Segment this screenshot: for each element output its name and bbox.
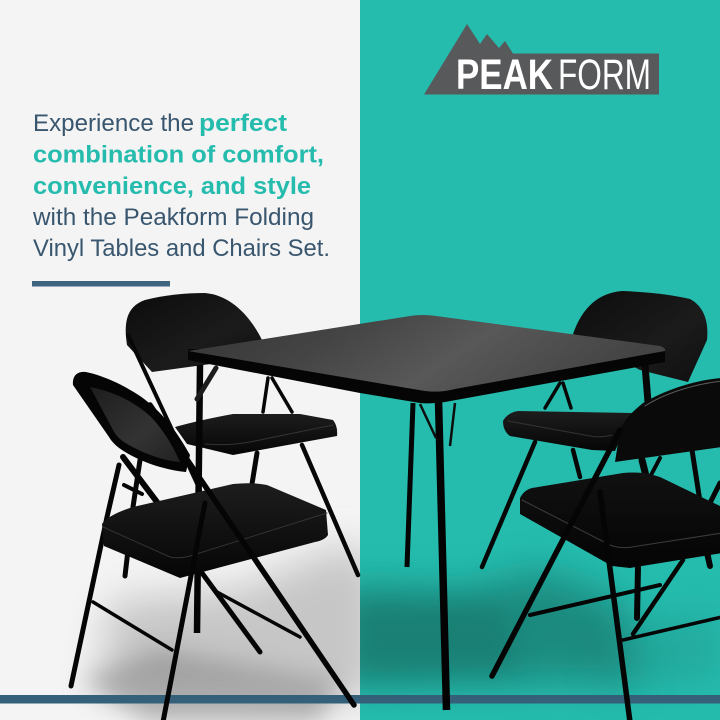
far table leg [407, 403, 413, 567]
chair back [126, 293, 262, 372]
seat rim highlight [103, 513, 327, 558]
line 1: perfect [199, 110, 287, 137]
line 4: with the Peakform Folding [32, 204, 314, 231]
chair back [573, 291, 707, 382]
seat [102, 483, 328, 578]
seat [520, 472, 720, 568]
accent bar under headline [32, 281, 170, 286]
logo mountain badge [424, 24, 659, 94]
bottom stripe [0, 695, 720, 704]
chair back highlight [645, 381, 720, 406]
second front leg [163, 503, 205, 720]
floor shadow: right side [340, 570, 720, 686]
long frame leg [492, 430, 620, 676]
logo wordmark: PEAK [456, 51, 553, 99]
table top edge [188, 349, 665, 403]
line 2: combination of comfort, [33, 142, 324, 168]
seat highlight [508, 421, 612, 437]
logo: Peakform [424, 24, 659, 99]
logo wordmark: FORM [558, 51, 651, 99]
chair back panel [90, 387, 180, 462]
floor shadow: left side [80, 545, 380, 720]
rear legs and bars [202, 573, 260, 652]
legs [482, 442, 535, 567]
table hinge bracket [420, 403, 455, 446]
rear legs and bars [633, 560, 683, 634]
seat rim highlight [522, 500, 720, 548]
folding table [188, 315, 665, 710]
chair back outer frame [73, 372, 190, 472]
front-right chair [492, 378, 720, 720]
front-left chair [71, 372, 354, 720]
chair back panel [615, 378, 720, 462]
back-left chair [125, 293, 358, 576]
left front leg [71, 465, 119, 686]
line 3: convenience, and style [33, 173, 311, 200]
line 5: Vinyl Tables and Chairs Set. [33, 235, 330, 262]
cross brace [123, 457, 157, 502]
front leg [600, 492, 630, 720]
seat [503, 411, 632, 451]
right teal background panel [360, 0, 720, 720]
long frame leg [150, 405, 354, 705]
seat highlight [205, 425, 333, 445]
near table leg [438, 400, 446, 710]
left table leg and hinge [197, 365, 200, 633]
headline text block [32, 110, 330, 262]
left background panel [0, 0, 360, 720]
line 1: Experience the [33, 110, 194, 137]
table top surface [188, 315, 665, 392]
back-right chair [482, 291, 710, 567]
seat [175, 414, 337, 455]
legs [128, 335, 200, 490]
